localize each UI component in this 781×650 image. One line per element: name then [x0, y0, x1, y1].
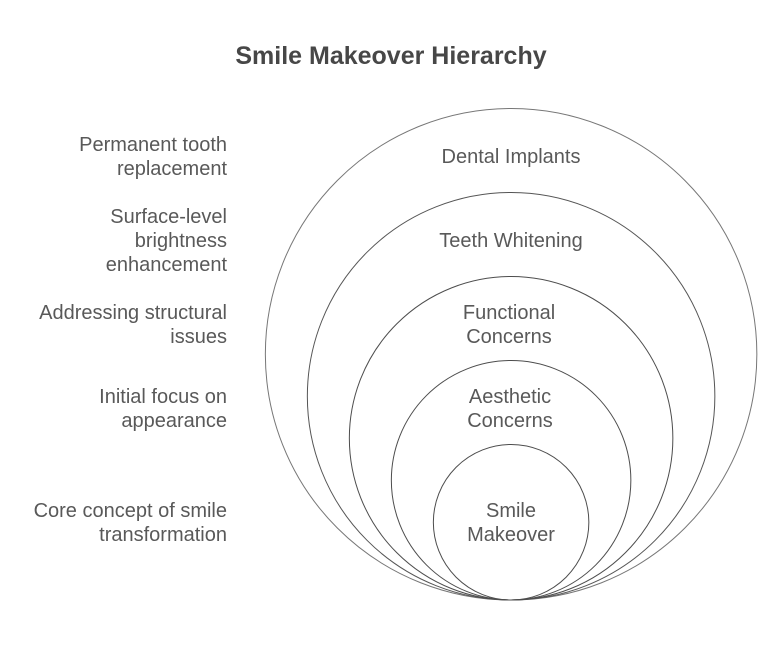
description: aesthetic concerns: appearance: [121, 410, 227, 432]
label: functional concerns: Concerns: [466, 326, 552, 348]
description: teeth whitening: Surface-level: [110, 206, 227, 228]
description: smile makeover: transformation: [99, 524, 227, 546]
description: teeth whitening: brightness: [135, 230, 227, 252]
label: smile makeover: Smile: [486, 500, 536, 522]
circle: dental implants: [265, 108, 757, 600]
circle: teeth whitening: [307, 192, 715, 600]
label: dental implants: Dental Implants: [442, 146, 580, 168]
label: teeth whitening: Teeth Whitening: [439, 230, 583, 252]
label: aesthetic concerns: Aesthetic: [469, 386, 551, 408]
description: aesthetic concerns: Initial focus on: [99, 386, 227, 408]
circle: functional concerns: [349, 276, 673, 600]
label: functional concerns: Functional: [463, 302, 555, 324]
circle: smile makeover: [433, 444, 589, 600]
label: smile makeover: Makeover: [467, 524, 555, 546]
description: smile makeover: Core concept of smile: [34, 500, 227, 522]
label: aesthetic concerns: Concerns: [467, 410, 553, 432]
title: Smile Makeover Hierarchy: [235, 42, 547, 70]
description: functional concerns: issues: [170, 326, 227, 348]
description: dental implants: Permanent tooth: [79, 134, 227, 156]
circle: aesthetic concerns: [391, 360, 631, 600]
description: functional concerns: Addressing structural: [39, 302, 227, 324]
panel: nested circles: [265, 108, 757, 600]
description: dental implants: replacement: [117, 158, 227, 180]
description: teeth whitening: enhancement: [106, 254, 227, 276]
